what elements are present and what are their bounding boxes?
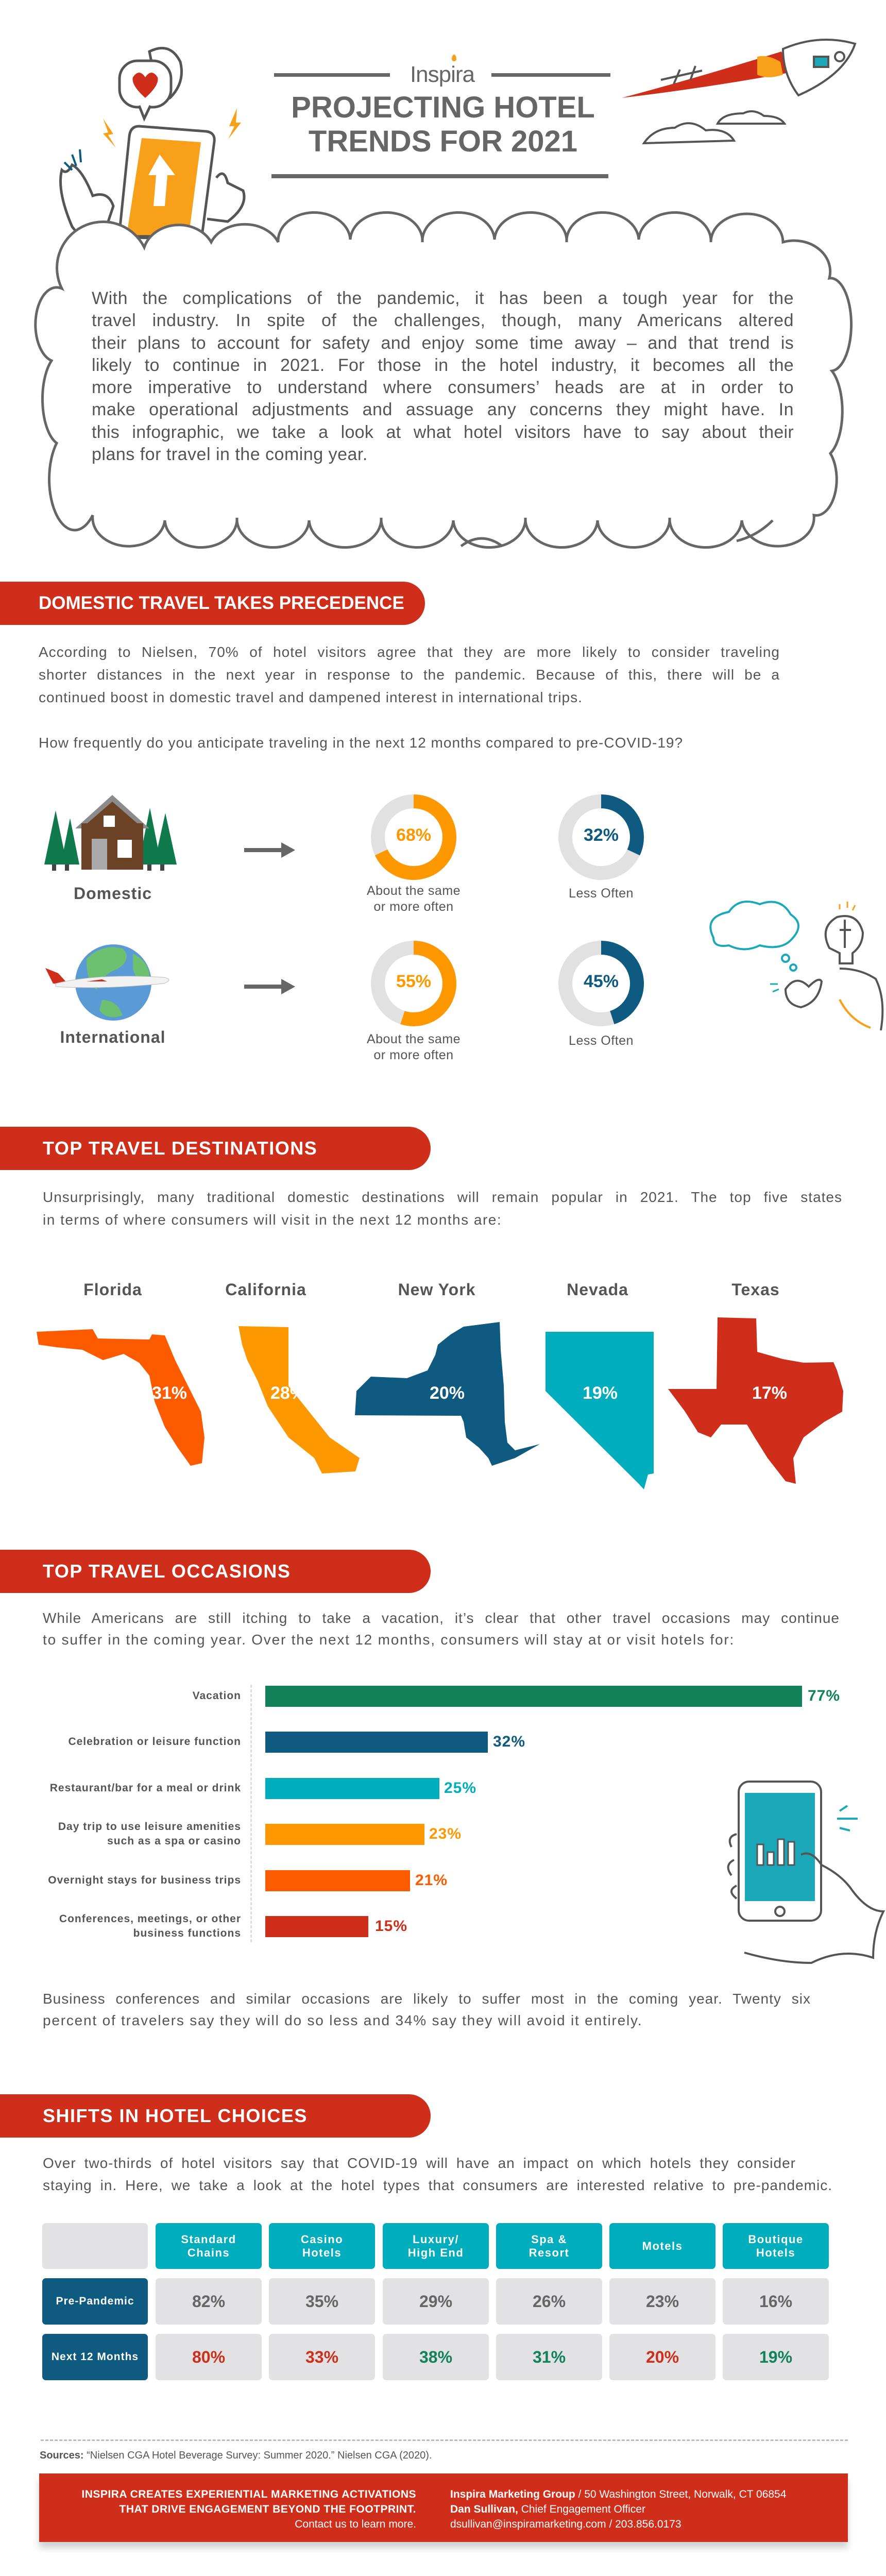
intro paragraph: their plans to account for safety and enjoy some time away – and that trend is: [92, 333, 794, 353]
intro paragraph: [92, 289, 794, 464]
header illustration: phone and bubble: [59, 46, 245, 239]
text: domestic intro: continued boost in domestic travel and dampened interest in international trips.: [39, 689, 583, 705]
text: occasions intro: While Americans are still itching to take a vacation, it’s clear that other travel occasions may continue: [43, 1610, 840, 1626]
row: pre-pandemic: Pre-Pandemic: [56, 2295, 134, 2307]
banner: domestic travel: DOMESTIC TRAVEL TAKES PRECEDENCE: [39, 593, 404, 613]
icon: globe and plane: [45, 944, 169, 1021]
state: texas: 17%: [752, 1383, 787, 1403]
bar: restaurant: [50, 1778, 476, 1799]
text: hotel choices intro: [43, 2155, 832, 2193]
row: next 12 months: Next 12 Months: [52, 2351, 139, 2363]
bar: celebration: 32%: [493, 1733, 525, 1750]
bar: vacation: [193, 1686, 840, 1707]
state: texas: [668, 1280, 843, 1484]
row: next 12 months: 19%: [759, 2347, 792, 2366]
state: california: [225, 1280, 360, 1473]
bar: conferences: [59, 1913, 407, 1939]
state: nevada: [546, 1280, 654, 1489]
donut: domestic 68%: or more often: [373, 900, 454, 914]
banner: top travel destinations: TOP TRAVEL DESTINATIONS: [43, 1138, 317, 1159]
text: hotel choices intro: Over two-thirds of hotel visitors say that COVID-19 will have an impact on which hotels they consider: [43, 2155, 796, 2171]
footer: dsullivan@inspiramarketing.com / 203.856.0173: [450, 2518, 681, 2530]
donut: international 55%: 55%: [396, 972, 431, 991]
title: TRENDS FOR 2021: [309, 125, 577, 158]
banner: top travel occasions: TOP TRAVEL OCCASIONS: [43, 1561, 291, 1582]
text: domestic intro: shorter distances in the next year in response to the pandemic. Because of this, there will be a: [39, 667, 780, 683]
row: pre-pandemic: 16%: [759, 2292, 792, 2310]
bar: conferences: Conferences, meetings, or other: [59, 1913, 241, 1925]
row: pre-pandemic: 35%: [305, 2292, 338, 2310]
state: new york: [355, 1280, 540, 1466]
donut: international 45%: 45%: [584, 972, 619, 991]
icon: cabin: [44, 795, 177, 871]
intro paragraph: more imperative to understand where consumers’ heads are at in order to: [92, 378, 794, 397]
bar: day trip: 23%: [429, 1825, 462, 1842]
bar: conferences: business functions: [133, 1927, 241, 1939]
banner: top travel occasions: [0, 1550, 431, 1593]
table header: Boutique: [748, 2233, 804, 2245]
donut: international 55%: About the same: [367, 1032, 461, 1046]
intro paragraph: make operational adjustments and assuage any concerns they might have. In: [92, 400, 794, 419]
intro paragraph: plans for travel in the coming year.: [92, 445, 368, 464]
footer: Inspira Marketing Group / 50 Washington Street, Norwalk, CT 06854: [450, 2488, 786, 2500]
icon: thinking bird doodle: [709, 901, 884, 1030]
donut: domestic 68%: 68%: [396, 825, 431, 845]
text: occasions conclusion: [43, 1991, 811, 2028]
table header: Hotels: [302, 2246, 342, 2259]
text: destinations intro: in terms of where consumers will visit in the next 12 months are:: [43, 1212, 502, 1228]
bar chart: occasions: [250, 1685, 252, 1942]
donut: international 55%: or more often: [373, 1048, 454, 1062]
table header: Spa &: [531, 2233, 567, 2245]
bar: vacation: 77%: [808, 1687, 840, 1704]
text: domestic intro: According to Nielsen, 70% of hotel visitors agree that they are more likely to consider traveling: [39, 644, 780, 660]
table: hotel choices: [42, 2223, 829, 2380]
row: next 12 months: [42, 2334, 829, 2380]
state: nevada: 19%: [583, 1383, 618, 1403]
label: domestic: Domestic: [74, 884, 152, 903]
donut: international 55%: [367, 941, 461, 1062]
banner: shifts in hotel choices: [0, 2094, 431, 2138]
logo: Inspira: Inspira: [410, 62, 474, 87]
text: domestic intro: [39, 644, 780, 705]
footer: THAT DRIVE ENGAGEMENT BEYOND THE FOOTPRINT.: [120, 2503, 416, 2515]
arrow: international: [244, 979, 295, 994]
footer: [39, 2473, 848, 2542]
donut: international 45%: Less Often: [569, 1033, 634, 1048]
text: occasions intro: to suffer in the coming year. Over the next 12 months, consumers will stay at or visit hotels for:: [43, 1632, 735, 1648]
text: question: How frequently do you anticipate traveling in the next 12 months compared to pre-COVID-19?: [39, 735, 683, 751]
state: texas: Texas: [731, 1280, 780, 1299]
banner: shifts in hotel choices: SHIFTS IN HOTEL CHOICES: [43, 2105, 308, 2126]
table header: Hotels: [756, 2246, 795, 2259]
row: next 12 months: 80%: [192, 2347, 225, 2366]
text: hotel choices intro: staying in. Here, we take a look at the hotel types that consumers are interested relative to pre-pandemic.: [43, 2177, 832, 2193]
text: occasions conclusion: percent of travelers say they will do so less and 34% say they will avoid it entirely.: [43, 2012, 642, 2028]
text: occasions conclusion: Business conferences and similar occasions are likely to suffer most in the coming year. Twenty six: [43, 1991, 811, 2007]
donut: international 45%: [558, 941, 644, 1048]
donut: domestic 68%: About the same: [367, 884, 461, 898]
table header: [42, 2223, 829, 2269]
footer: INSPIRA CREATES EXPERIENTIAL MARKETING ACTIVATIONS: [81, 2488, 416, 2500]
row: next 12 months: 31%: [533, 2347, 566, 2366]
logo: Inspira: [274, 55, 610, 87]
state: california: 28%: [270, 1383, 305, 1403]
intro paragraph: likely to continue in 2021. For those in the hotel industry, it becomes all the: [92, 355, 794, 375]
text: destinations intro: [43, 1189, 842, 1228]
table header: Chains: [188, 2246, 230, 2259]
footer: Contact us to learn more.: [295, 2518, 416, 2530]
row: next 12 months: 38%: [419, 2347, 452, 2366]
state: florida: [37, 1280, 205, 1466]
row: pre-pandemic: 82%: [192, 2292, 225, 2310]
table header: Casino: [301, 2233, 343, 2245]
state: nevada: Nevada: [567, 1280, 628, 1299]
sources: Sources: “Nielsen CGA Hotel Beverage Survey: Summer 2020.” Nielsen CGA (2020).: [40, 2450, 432, 2461]
bar: vacation: Vacation: [193, 1690, 241, 1702]
bar: day trip: [58, 1821, 462, 1847]
row: pre-pandemic: [42, 2278, 829, 2325]
table header: Luxury/: [413, 2233, 459, 2245]
state: new york: 20%: [430, 1383, 465, 1403]
bar: day trip: Day trip to use leisure amenities: [58, 1821, 241, 1833]
table header: Standard: [181, 2233, 236, 2245]
row: next 12 months: 33%: [305, 2347, 338, 2366]
intro cloud: [34, 211, 853, 549]
bar: day trip: such as a spa or casino: [107, 1835, 241, 1847]
text: occasions intro: [43, 1610, 840, 1648]
arrow: domestic: [244, 842, 295, 858]
table header: High End: [408, 2246, 464, 2259]
bar: celebration: [68, 1732, 525, 1753]
icon: heart speech bubble: [120, 48, 181, 118]
row: pre-pandemic: 26%: [533, 2292, 566, 2310]
state: california: California: [225, 1280, 306, 1299]
donut: domestic 32%: 32%: [584, 825, 619, 845]
state: new york: New York: [398, 1280, 475, 1299]
bar: celebration: Celebration or leisure function: [68, 1736, 241, 1748]
icon: phone with arrow: [61, 126, 244, 252]
text: destinations intro: Unsurprisingly, many traditional domestic destinations will remain popular in 2021. The top five states: [43, 1189, 842, 1205]
row: pre-pandemic: 29%: [419, 2292, 452, 2310]
intro paragraph: this infographic, we take a look at what hotel visitors have to say about their: [92, 422, 794, 442]
donut: domestic 68%: [367, 794, 461, 914]
bar: overnight: Overnight stays for business trips: [48, 1874, 241, 1886]
state: florida: Florida: [83, 1280, 142, 1299]
banner: top travel destinations: [0, 1127, 431, 1170]
row: pre-pandemic: 23%: [646, 2292, 679, 2310]
table header: Resort: [529, 2246, 569, 2259]
icon: rocket and clouds: [622, 39, 856, 144]
bar: overnight: [48, 1870, 448, 1891]
donut: domestic 32%: Less Often: [569, 886, 634, 901]
title: PROJECTING HOTEL: [291, 91, 595, 124]
footer: Dan Sullivan, Chief Engagement Officer: [450, 2503, 645, 2515]
bar: overnight: 21%: [415, 1872, 448, 1889]
row: next 12 months: 20%: [646, 2347, 679, 2366]
title: [291, 91, 595, 158]
table header: Motels: [642, 2239, 683, 2252]
bar: restaurant: Restaurant/bar for a meal or drink: [50, 1782, 241, 1794]
intro paragraph: travel industry. In spite of the challenges, though, many Americans altered: [92, 311, 794, 330]
banner: domestic travel: [0, 582, 425, 625]
state: florida: 31%: [152, 1383, 187, 1403]
bar: restaurant: 25%: [444, 1780, 476, 1797]
bar: conferences: 15%: [375, 1918, 407, 1935]
donut: domestic 32%: [558, 794, 644, 901]
label: international: International: [60, 1028, 166, 1046]
icon: hand holding phone: [727, 1781, 885, 1964]
intro paragraph: With the complications of the pandemic, it has been a tough year for the: [92, 289, 794, 308]
